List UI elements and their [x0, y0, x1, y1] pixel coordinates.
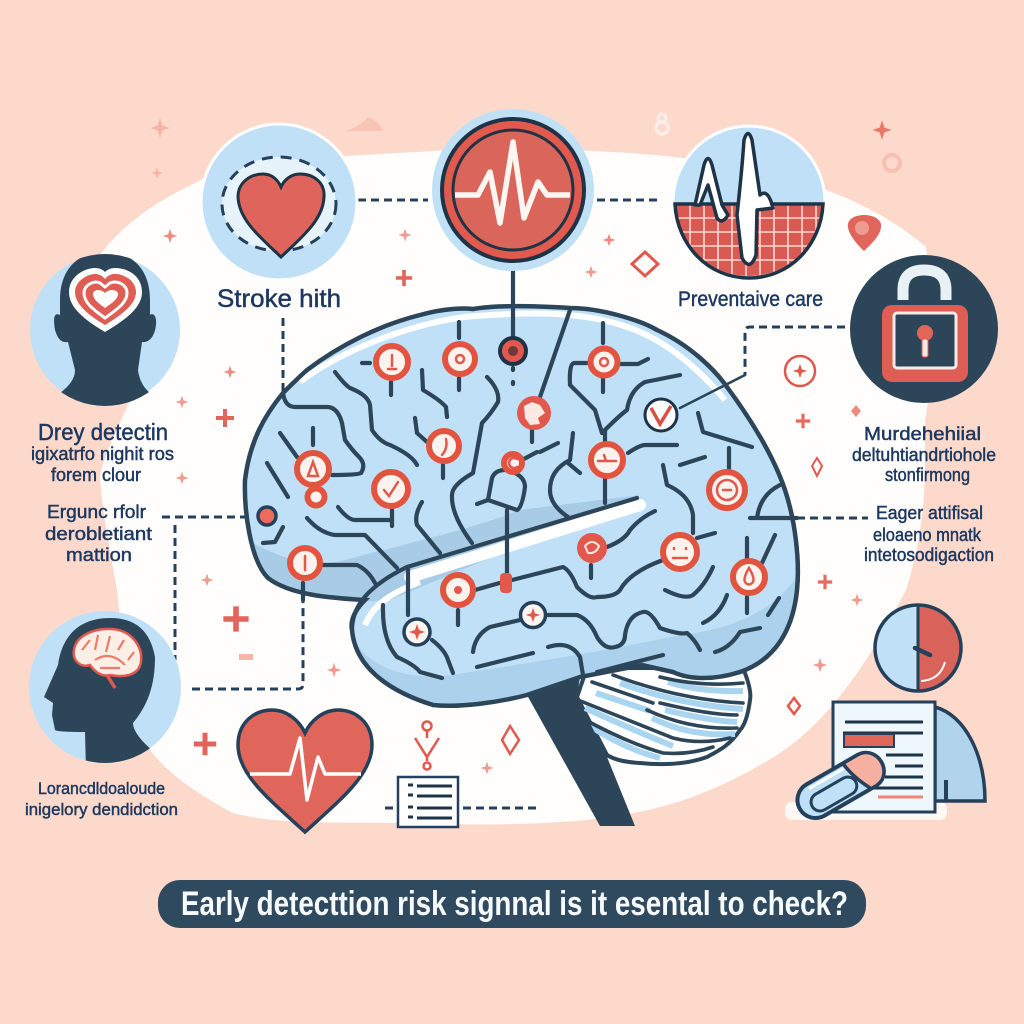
text block: right first: Murdehehiial: [864, 424, 981, 444]
text block: right second: [864, 502, 994, 565]
icon: person with report and pill: [785, 605, 985, 825]
text block: early detection left: Drey detectin: [38, 419, 168, 445]
dashed connector lines: [162, 200, 868, 808]
clock head: [875, 605, 961, 691]
icon: warning pin: [415, 722, 439, 770]
text block: bottom left: inigelory dendidction: [25, 800, 178, 819]
text block: right second: Eager attifisal: [876, 502, 983, 523]
text block: right first: [852, 424, 996, 485]
text block: right second: intetosodigaction: [864, 545, 994, 565]
icon: padlock circle: [850, 255, 998, 403]
icon: checklist document: [398, 777, 458, 827]
report sheet: [833, 702, 935, 812]
icon: ECG chart circle: [670, 126, 830, 284]
text block: early detection left: igixatrfo nighit ros: [31, 444, 174, 464]
text block: bottom left: Lorancdldoaloude: [38, 779, 165, 798]
text block: left second: derobletiant: [45, 523, 152, 544]
icon: heart with pulse: [238, 710, 372, 832]
brain stem: [527, 677, 635, 826]
base shadow: [785, 802, 947, 820]
icon: head profile with brain: [29, 611, 181, 770]
shoulder: [935, 707, 985, 801]
heading: stroke health: Stroke hith: [217, 285, 341, 313]
text block: right first: stonfirmong: [885, 465, 970, 485]
icon: head with heart: [30, 252, 180, 408]
banner: Early detecttion risk signnal is it esental to check?: [181, 885, 848, 923]
pill: [791, 746, 890, 825]
text block: early detection left: forem clour: [51, 465, 141, 485]
icon: heart circle: [201, 124, 357, 280]
text block: left second: [45, 501, 152, 565]
brain: [240, 270, 800, 720]
brain body: [245, 306, 798, 706]
sylvian fissure: [352, 498, 637, 630]
banner: [158, 880, 866, 928]
text block: left second: Ergunc rfolr: [47, 501, 146, 522]
text block: left second: mattion: [66, 544, 132, 565]
brain nodes: [258, 338, 765, 645]
brain folds: [263, 270, 797, 678]
heading: preventative care: Preventaive care: [678, 288, 823, 311]
icon: central pulse circle: [432, 109, 594, 271]
text block: right first: deltuhtiandrtiohole: [852, 445, 996, 465]
text block: right second: eloaeno mnatk: [873, 525, 982, 545]
decorative sparkles: [150, 114, 900, 774]
cerebellum: [577, 668, 750, 764]
brain shading: [240, 313, 800, 720]
white central blob: [99, 149, 931, 824]
text block: early detection left: [31, 419, 174, 485]
brain outline: [245, 306, 798, 706]
text block: bottom left: [25, 779, 178, 819]
red pill marker: [500, 573, 512, 593]
